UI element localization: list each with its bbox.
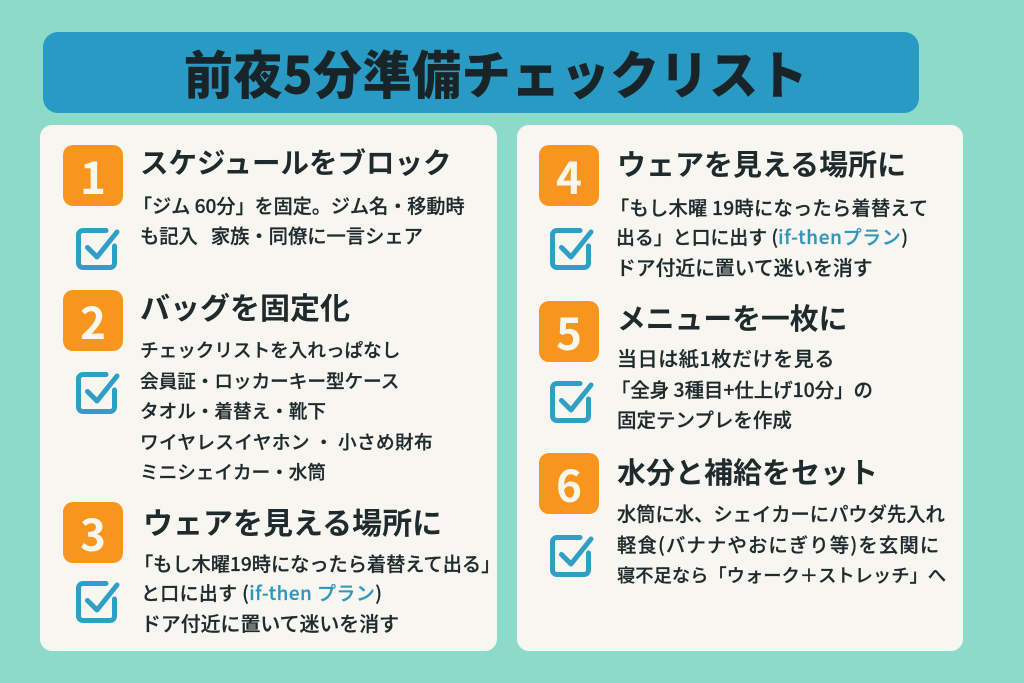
- number 3: 3: [80, 500, 106, 564]
- step 5: [539, 297, 873, 433]
- number 4: [539, 145, 599, 206]
- number 2: [63, 290, 123, 351]
- check icon 6: [550, 535, 594, 577]
- number 5: [539, 301, 599, 362]
- text 3: 「もし木曜19時になったら着替えて出る」: [134, 549, 500, 577]
- number 2: 2: [80, 288, 106, 352]
- number 5: 5: [556, 299, 582, 363]
- step 6: [539, 450, 946, 588]
- text 5: [611, 343, 873, 433]
- step 3: [63, 499, 500, 637]
- text 1: 「ジム 60分」を固定。ジム名・移動時: [133, 191, 465, 219]
- check icon 3: [76, 581, 120, 623]
- check icon 4: [550, 228, 594, 270]
- number 4: 4: [556, 143, 582, 207]
- text 2: [140, 336, 433, 485]
- text 3: [134, 549, 500, 637]
- text 2: チェックリストを入れっぱなし: [140, 336, 400, 363]
- panel: left steps: [40, 125, 497, 651]
- text 2: ミニシェイカー・水筒: [140, 458, 326, 485]
- heading 5: メニューを一枚に: [617, 297, 847, 338]
- number 1: 1: [80, 143, 106, 207]
- heading 3: ウェアを見える場所に: [143, 499, 442, 543]
- title banner: [43, 32, 919, 113]
- number 6: [539, 453, 599, 514]
- heading 1: スケジュールをブロック: [140, 141, 452, 182]
- text 3: と口に出す (if-then プラン): [141, 579, 382, 606]
- text 1: も記入 家族・同僚に一言シェア: [140, 221, 423, 249]
- heading 6: 水分と補給をセット: [617, 450, 878, 492]
- heading 2: バッグを固定化: [140, 284, 350, 328]
- heading 4: ウェアを見える場所に: [617, 142, 906, 184]
- text 4: 「もし木曜 19時になったら着替えて: [610, 193, 928, 221]
- text 4: 出る」と口に出す (if-thenプラン): [616, 223, 908, 250]
- title: 前夜5分準備チェックリスト: [184, 35, 808, 110]
- text 6: 寝不足なら「ウォーク＋ストレッチ」へ: [617, 562, 946, 588]
- text 1: [133, 191, 465, 249]
- text 2: 会員証・ロッカーキー型ケース: [140, 366, 399, 394]
- text 6: [617, 499, 946, 588]
- panel: right steps: [517, 125, 963, 651]
- text 4: ドア付近に置いて迷いを消す: [616, 252, 873, 281]
- text 5: 固定テンプレを作成: [617, 404, 792, 433]
- text 5: 当日は紙1枚だけを見る: [617, 343, 835, 372]
- text 3: ドア付近に置いて迷いを消す: [141, 608, 399, 637]
- text 2: ワイヤレスイヤホン ・ 小さめ財布: [140, 428, 433, 454]
- number 1: [63, 145, 123, 206]
- check icon 1: [76, 228, 120, 270]
- step 1: [63, 141, 465, 270]
- step 4: [539, 142, 928, 281]
- text 2: タオル・着替え・靴下: [140, 397, 326, 424]
- check icon 5: [550, 381, 594, 423]
- check icon 2: [76, 372, 120, 414]
- text 6: 軽食(バナナやおにぎり等)を玄関に: [617, 530, 940, 558]
- text 4: [610, 193, 928, 281]
- text 5: 「全身 3種目+仕上げ10分」の: [611, 374, 873, 402]
- text 6: 水筒に水、シェイカーにパウダ先入れ: [617, 499, 945, 527]
- number 3: [63, 502, 123, 563]
- step 2: [63, 284, 433, 485]
- number 6: 6: [556, 451, 582, 515]
